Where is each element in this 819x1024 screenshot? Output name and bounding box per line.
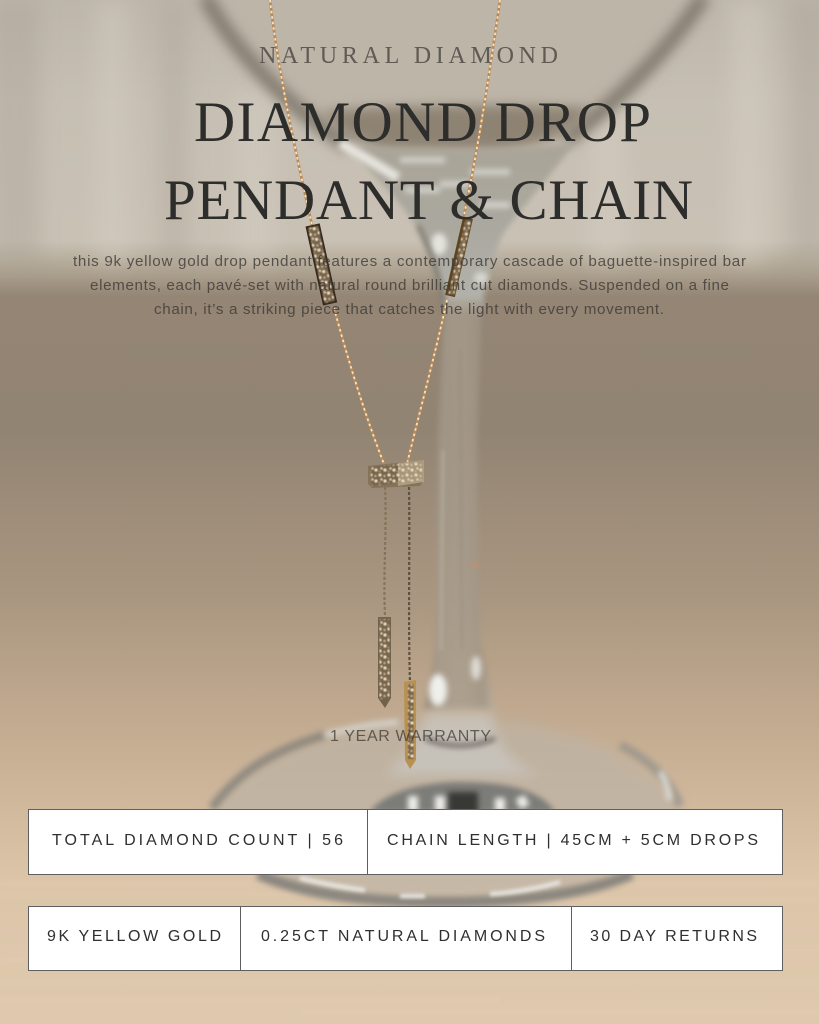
- martini glass: foot: [210, 712, 682, 902]
- spec row 2: 30 DAY RETURNS: [590, 928, 757, 945]
- cone highlights: [340, 143, 398, 178]
- right rim: [620, 745, 680, 806]
- spec row 1: CHAIN LENGTH | 45CM + 5CM DROPS: [387, 832, 758, 849]
- left drop bar: [378, 617, 391, 708]
- eyebrow: natural diamond: NATURAL DIAMOND: [259, 43, 558, 69]
- left edge shadow: [205, 0, 350, 146]
- description: [73, 253, 746, 318]
- necklace: [270, 0, 500, 769]
- bottom rim: [258, 874, 632, 902]
- neck flare: [385, 712, 540, 775]
- left drop chain: [384, 487, 386, 616]
- left chain: [270, 0, 384, 464]
- spec row 2: 0.25CT NATURAL DIAMONDS: [261, 928, 545, 945]
- main title: PENDANT & CHAIN: [164, 169, 693, 232]
- warranty note: 1 YEAR WARRANTY: [330, 728, 491, 745]
- right edge shadow: [566, 0, 704, 140]
- martini glass: stem: [424, 300, 495, 710]
- spec row 2: 9K YELLOW GOLD: [47, 928, 221, 945]
- main title: DIAMOND DROP: [194, 91, 651, 154]
- description: chain, it’s a striking piece that catches the light with every movement.: [154, 301, 664, 318]
- spec row 1: TOTAL DIAMOND COUNT | 56: [52, 832, 343, 849]
- right chain: [407, 0, 500, 464]
- martini glass: bowl: [200, 0, 706, 310]
- slider ring: [368, 460, 424, 488]
- main title: [164, 91, 693, 232]
- spec row 1: [28, 810, 782, 874]
- liquid shadow at bowl base: [322, 105, 590, 150]
- left rim: [212, 735, 325, 808]
- base reflections: [370, 782, 555, 812]
- foot disc: [210, 720, 682, 900]
- right drop bar: [404, 680, 416, 769]
- left bar pendant: [306, 223, 337, 306]
- right bar pendant: [445, 217, 473, 297]
- description: elements, each pavé-set with natural round brilliant cut diamonds. Suspended on a fine: [90, 277, 729, 294]
- cone below bowl: [342, 142, 576, 310]
- right drop chain: [409, 487, 410, 682]
- bowl body: [200, 0, 706, 148]
- spec row 2: [28, 906, 782, 970]
- description: this 9k yellow gold drop pendant features a contemporary cascade of baguette-inspired bar: [73, 253, 746, 270]
